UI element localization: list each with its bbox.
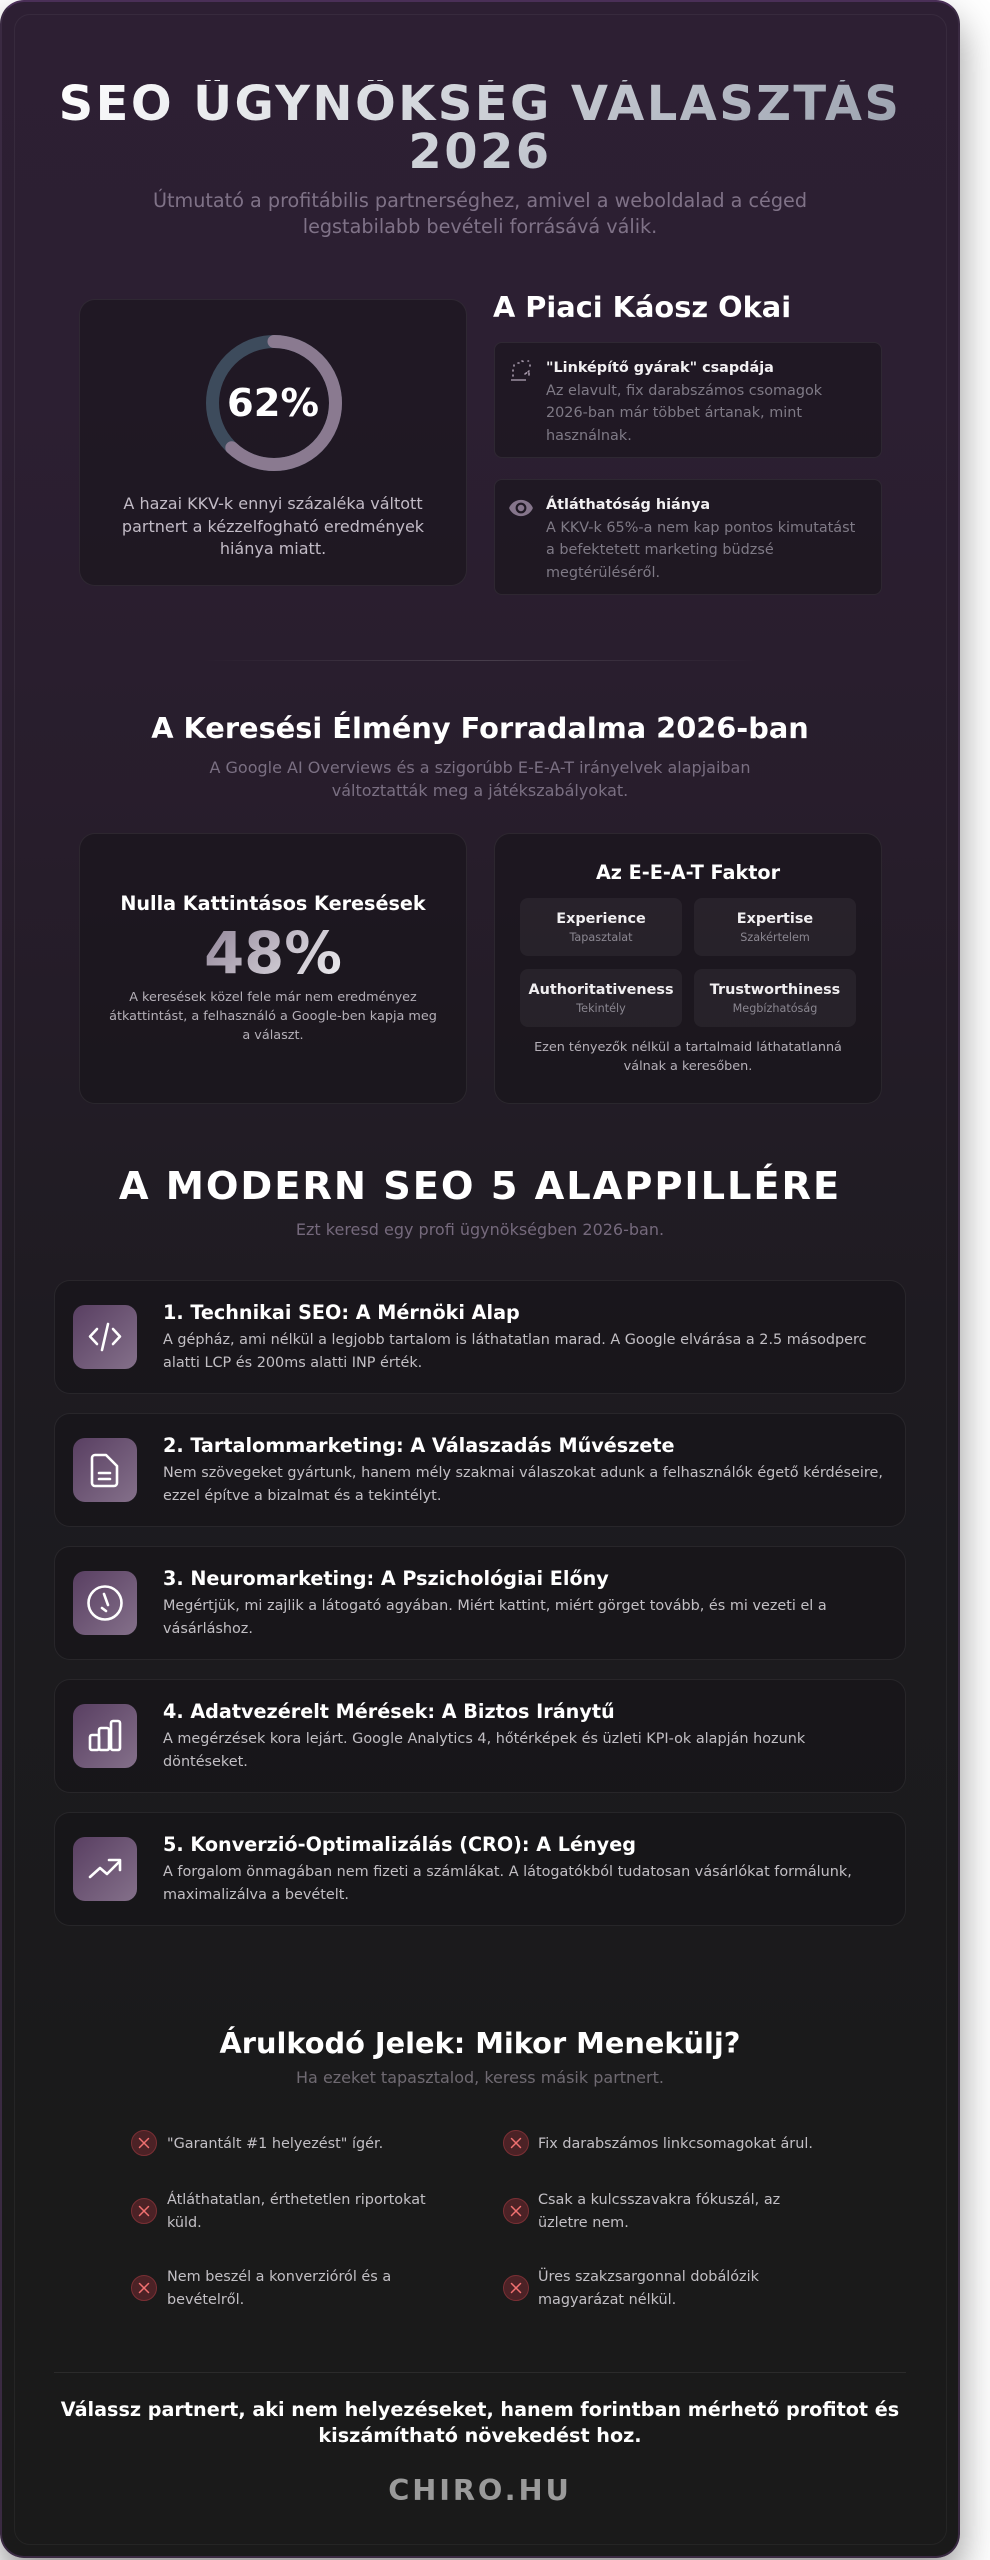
divider	[200, 660, 760, 661]
factor: trustworthiness: Megbízhatóság	[733, 1002, 817, 1015]
warning icon 4	[503, 2198, 529, 2224]
factor: experience: Tapasztalat	[569, 931, 633, 944]
panel: zero click searches	[79, 833, 467, 1104]
warning text 6: magyarázat nélkül.	[538, 2292, 676, 2308]
warning text 4	[538, 2192, 780, 2230]
donut chart: 62%	[206, 335, 342, 471]
panel: lack of transparency	[494, 479, 882, 595]
subheading: five pillars: Ezt keresd egy profi ügynökségben 2026-ban.	[296, 1220, 664, 1239]
factor: expertise: Expertise	[737, 911, 813, 927]
subheading: warning signs: Ha ezeket tapasztalod, keress másik partnert.	[296, 2068, 664, 2087]
icon: document	[73, 1438, 137, 1502]
pillar 3 title: 3. Neuromarketing: A Pszichológiai Előny	[163, 1567, 609, 1590]
stat description: átkattintást, a felhasználó a Google-ben kapja meg	[109, 1009, 437, 1024]
subtitle	[153, 188, 807, 238]
pillar 2 text: Nem szövegeket gyártunk, hanem mély szakmai válaszokat adunk a felhasználók égető kérdéseire,	[163, 1465, 883, 1481]
text: link factories: 2026-ban már többet ártanak, mint	[546, 405, 802, 421]
warning icon 2	[503, 2130, 529, 2156]
closing statement: Válassz partnert, aki nem helyezéseket, hanem forintban mérhető profitot és	[61, 2398, 899, 2421]
pillar 3 text	[163, 1598, 827, 1636]
pillar 3 text: vásárláshoz.	[163, 1620, 253, 1636]
pillar 5 title: 5. Konverzió-Optimalizálás (CRO): A Lényeg	[163, 1833, 636, 1856]
text: transparency: megtérüléséről.	[546, 564, 660, 580]
icon: clock	[73, 1571, 137, 1635]
warning text 5: bevételről.	[167, 2292, 244, 2308]
closing statement	[60, 2398, 899, 2446]
factor: expertise: Szakértelem	[740, 931, 810, 944]
factor: authoritativeness	[520, 969, 682, 1027]
factor: authoritativeness: Authoritativeness	[528, 982, 674, 998]
stat: 48%: 48%	[204, 920, 342, 987]
warning text 6	[538, 2268, 759, 2308]
pillar 1 text: alatti LCP és 200ms alatti INP érték.	[163, 1354, 422, 1370]
panel: pillar 3	[54, 1546, 906, 1660]
text: transparency: a befektetett marketing büdzsé	[546, 542, 774, 558]
pillar 4 text: döntéseket.	[163, 1754, 248, 1770]
pillar 5 text: A forgalom önmagában nem fizeti a számlákat. A látogatókból tudatosan vásárlókat formálunk,	[163, 1864, 852, 1880]
icon: link factory	[511, 360, 531, 381]
warning text 5: Nem beszél a konverzióról és a	[167, 2269, 391, 2285]
heading: search revolution: A Keresési Élmény Forradalma 2026-ban	[151, 711, 809, 745]
pillar 5 text: maximalizálva a bevételt.	[163, 1886, 349, 1902]
factor: expertise	[694, 898, 856, 956]
subtitle: legstabilabb bevételi forrásává válik.	[303, 214, 657, 238]
warning text 1: "Garantált #1 helyezést" ígér.	[167, 2136, 383, 2152]
icon: trending up	[73, 1837, 137, 1901]
subtitle: Útmutató a profitábilis partnerséghez, amivel a weboldalad a céged	[153, 189, 807, 212]
factor: experience: Experience	[556, 911, 646, 927]
text: transparency: A KKV-k 65%-a nem kap pontos kimutatást	[546, 520, 855, 536]
panel: link factories	[494, 342, 882, 458]
factor: authoritativeness: Tekintély	[576, 1002, 626, 1015]
stat description: hiánya miatt.	[220, 539, 326, 558]
pillar 1 text	[163, 1332, 867, 1370]
pillar 4 text	[163, 1731, 806, 1770]
stat description: A hazai KKV-k ennyi százaléka váltott	[123, 494, 423, 513]
text: transparency	[546, 496, 855, 580]
footer divider	[54, 2372, 906, 2373]
text: link factories: "Linképítő gyárak" csapdája	[546, 360, 774, 376]
warning text 4: Csak a kulcsszavakra fókuszál, az	[538, 2192, 780, 2208]
panel: pillar 1	[54, 1280, 906, 1394]
icon: eye	[509, 500, 533, 516]
pillar 2 title: 2. Tartalommarketing: A Válaszadás Művészete	[163, 1434, 675, 1457]
pillar 3 text: Megértjük, mi zajlik a látogató agyában. Miért kattint, miért görget tovább, és mi vezeti el a	[163, 1598, 827, 1614]
warning text 4: üzletre nem.	[538, 2214, 629, 2230]
title: SEO ÜGYNÖKSÉG VÁLASZTÁS	[59, 76, 901, 132]
icon: bar chart	[73, 1704, 137, 1768]
stat description: a választ.	[242, 1028, 304, 1043]
panel: 62% statistic	[79, 299, 467, 586]
subheading: search revolution	[209, 758, 750, 800]
heading: warning signs: Árulkodó Jelek: Mikor Menekülj?	[219, 2026, 740, 2060]
panel: E-E-A-T	[494, 833, 882, 1104]
panel note	[534, 1040, 842, 1074]
pillar 1 text: A gépház, ami nélkül a legjobb tartalom is láthatatlan marad. A Google elvárása a 2.5 másodperc	[163, 1332, 867, 1348]
pillar 5 text	[163, 1864, 852, 1902]
heading: market chaos: A Piaci Káosz Okai	[493, 290, 791, 324]
warning icon 5	[131, 2275, 157, 2301]
stat value: 62%	[227, 381, 319, 426]
stat description: A keresések közel fele már nem eredményez	[129, 990, 417, 1005]
text: link factories	[546, 360, 822, 444]
panel: pillar 4	[54, 1679, 906, 1793]
text: link factories: használnak.	[546, 428, 632, 444]
title	[50, 80, 910, 176]
panel heading: Az E-E-A-T Faktor	[596, 861, 780, 884]
subheading: search revolution: A Google AI Overviews és a szigorúbb E-E-A-T irányelvek alapjaiban	[209, 758, 750, 777]
panel: pillar 2	[54, 1413, 906, 1527]
warning text 3: Átláthatatlan, érthetetlen riportokat	[167, 2192, 426, 2208]
closing statement: kiszámítható növekedést hoz.	[318, 2424, 642, 2446]
pillar 4 title: 4. Adatvezérelt Mérések: A Biztos Iránytű	[163, 1700, 615, 1723]
warning text 5	[167, 2269, 391, 2308]
warning icon 1	[131, 2130, 157, 2156]
warning text 3: küld.	[167, 2214, 202, 2230]
stat description: partnert a kézzelfogható eredmények	[122, 516, 424, 536]
brand name: CHIRO.HU	[388, 2473, 572, 2507]
stat description	[109, 990, 437, 1043]
warning icon 3	[131, 2198, 157, 2224]
panel note: válnak a keresőben.	[624, 1059, 752, 1074]
heading: five pillars: A MODERN SEO 5 ALAPPILLÉRE	[119, 1164, 841, 1209]
subheading: search revolution: változtatták meg a játékszabályokat.	[332, 780, 628, 800]
panel heading: Nulla Kattintásos Keresések	[120, 892, 426, 915]
pillar 4 text: A megérzések kora lejárt. Google Analytics 4, hőtérképek és üzleti KPI-ok alapján hozunk	[163, 1731, 805, 1747]
warning icon 6	[503, 2275, 529, 2301]
warning text 6: Üres szakzsargonnal dobálózik	[538, 2269, 759, 2285]
icon: code	[73, 1305, 137, 1369]
warning text 2: Fix darabszámos linkcsomagokat árul.	[538, 2136, 813, 2152]
title: 2026	[408, 124, 552, 180]
text: link factories: Az elavult, fix darabszámos csomagok	[546, 382, 822, 398]
factor: trustworthiness: Trustworthiness	[710, 982, 840, 998]
pillar 2 text	[163, 1465, 883, 1504]
warning text 3	[167, 2190, 426, 2230]
panel: pillar 5	[54, 1812, 906, 1926]
text: transparency: Átláthatóság hiánya	[546, 497, 710, 513]
pillar 2 text: ezzel építve a bizalmat és a tekintélyt.	[163, 1488, 441, 1504]
factor: trustworthiness	[694, 969, 856, 1027]
factor: experience	[520, 898, 682, 956]
pillar 1 title: 1. Technikai SEO: A Mérnöki Alap	[163, 1301, 520, 1324]
stat description	[122, 494, 424, 558]
panel note: Ezen tényezők nélkül a tartalmaid láthatatlanná	[534, 1040, 842, 1055]
